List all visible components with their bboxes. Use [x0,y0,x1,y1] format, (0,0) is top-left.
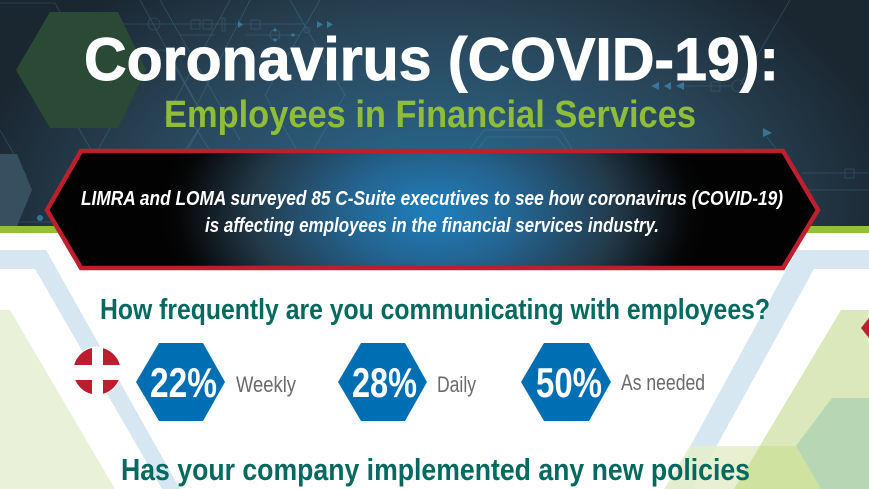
stat: 28% daily: 28% [352,359,417,406]
stat: 28% daily: Daily [437,372,476,397]
stat: 50% as needed [521,343,705,421]
subtitle: Employees in Financial Services [164,94,696,136]
title: Coronavirus (COVID-19): [84,26,779,93]
decorative hexagon: dark green [16,12,146,128]
green band under header [0,226,869,233]
banner [47,151,818,268]
banner text: is affecting employees in the financial services industry. [205,215,659,237]
stat: 22% weekly: Weekly [236,372,296,397]
stat: 50% as needed: 50% [536,359,602,406]
stat: 50% as needed: As needed [621,370,705,395]
background shapes below header [0,250,869,489]
circuit hexagon line pattern [0,0,869,227]
banner text [81,188,783,237]
stat: 22% weekly: 22% [150,359,217,406]
decorative hexagon: slate [0,154,32,226]
icon: red circle with white cross [73,347,121,395]
banner text: LIMRA and LOMA surveyed 85 C-Suite executives to see how coronavirus (COVID-19) [81,188,783,210]
header background [0,0,869,227]
arrowheads and nodes [37,21,772,221]
stat: 22% weekly [136,343,296,421]
stat: 28% daily [338,343,476,421]
question 1 heading: How frequently are you communicating with employees? [100,294,770,326]
question 2 heading: Has your company implemented any new policies [121,452,750,487]
